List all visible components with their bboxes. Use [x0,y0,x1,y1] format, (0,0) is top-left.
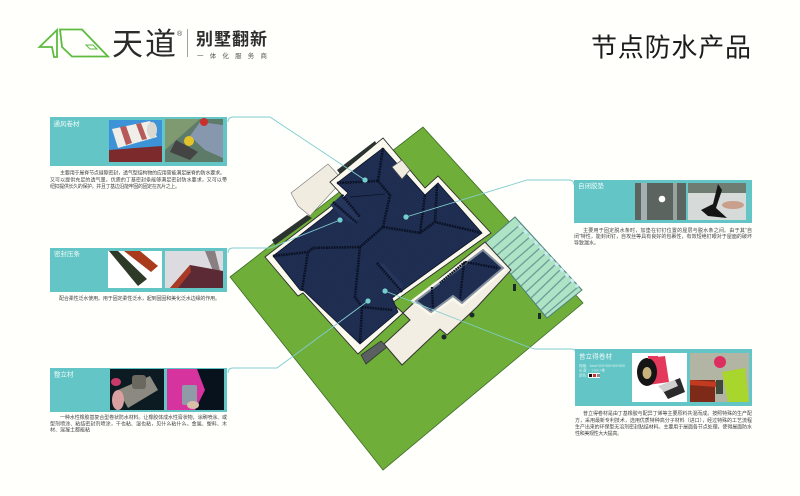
photo: roof worker [165,118,223,162]
registered mark: ® [177,30,183,38]
panel description: 纽扣提供长久的保护，并且丁基边沿能牢固的固定在瓦片之上。 [50,183,180,190]
photo: hand bending pad [688,183,746,220]
panel heading: 密封压条 [54,249,80,258]
icon: green roof [40,30,108,57]
panel description [50,170,227,190]
photo: membrane roll [109,120,162,162]
front terrace and right wing base [384,242,511,365]
spec list [579,363,625,378]
panel description: 又可以提供充足的透气量，优质的丁基密封条能够满足密封防水要求，又可以带 [50,176,227,184]
spec list: 长度：10m/卷 [579,368,606,372]
spec list: 颜色： [579,372,590,378]
title: 节点防水产品 [591,32,751,62]
photo: pad on screw [635,183,686,220]
panel description: 导致漏水。 [574,240,599,246]
colour swatches [588,373,600,378]
slogan: 别墅翻新 [196,29,267,49]
panel background [50,368,227,412]
lawn [230,127,583,470]
back patio and dark strips [272,141,377,245]
logo [40,27,268,62]
panel background [50,117,227,166]
photo: pink jacket worker [167,369,224,410]
panel description: 型剂喷涂、粘结密封剂喷涂，干也粘、湿也粘，见什么粘什么。金属、塑料、木 [50,420,227,428]
brand name: 天道 [112,27,176,62]
site plan illustration [230,127,583,470]
main roof [273,148,482,344]
spec list: 规格：1mm*100*300*400*500 [579,363,625,368]
roof ridges [273,148,482,343]
corner steps [361,341,387,364]
dormers [330,195,403,293]
pergola [442,217,582,340]
panel description [574,227,752,246]
panel heading: 普立得卷材 [579,352,612,360]
photo: red membrane roll [632,353,687,402]
panel description: 普立得卷材是由丁基橡胶与配异丁烯等主要原料共混而成。按照特殊的生产配 [583,410,752,417]
panel description: 闭”特性，能封闭钉，自攻丝等具有良好的包裹性，有效短绝钉眼对于屋面的破坏 [574,233,752,240]
separator [186,29,189,57]
panel background [574,180,752,223]
posts [442,284,541,340]
panel heading: 通风卷材 [54,119,80,128]
panel: 通风卷材 [50,117,227,190]
main house outline [265,138,491,354]
panel description [50,414,227,434]
panel heading: 自闭胶垫 [578,181,604,190]
panel: 普立得卷材 [575,349,752,437]
panel background [575,349,752,406]
panel description: 生产出来的环保型无溶剂密封贴结材料。主要用于屋面各节点处理，使得屋面防水 [575,424,752,430]
panel description: 性和美观性大大提高。 [575,430,622,437]
leader lines [228,117,576,373]
right wing roof [416,250,503,312]
photo: fixed flashing on tiles [165,251,223,288]
photo: sealant in hand [110,369,164,410]
photo: flashing strips [108,251,162,288]
photo: worker in vest [690,353,749,402]
panel heading: 整立材 [54,370,74,378]
panel description: 配合柔性泛水使用。用于固定柔性泛水，起到固固和美化泛水边缘的作用。 [59,295,220,302]
panel description [575,410,752,437]
subtitle: 一体化服务商 [197,51,268,60]
panel: 整立材 [50,368,227,434]
panel description: 一种水性橡胶基复合型卷状防水材料。让橡胶体成水性膏状物，涂刷喷涂、或 [60,414,227,421]
chimney square [392,160,410,179]
panel: 自闭胶垫 [574,180,752,246]
panel description: 主要用于屋脊节点缝隙密封，透气型结构物的应用需能满足屋脊的防水要求。 [60,170,225,176]
panel description: 材、混凝土都能粘 [50,426,90,434]
panel background [50,248,227,292]
panel: 密封压条 [50,248,227,302]
panel description: 主要用于固定脱水条时，加垫在钉钉位置的屋层与脱水条之间。由于其“自 [583,227,752,234]
panel description: 方，采用最新专利技术，选用优质特种高分子材料（进口），经过特殊的工艺流程 [575,417,752,424]
marker dots [337,177,409,304]
